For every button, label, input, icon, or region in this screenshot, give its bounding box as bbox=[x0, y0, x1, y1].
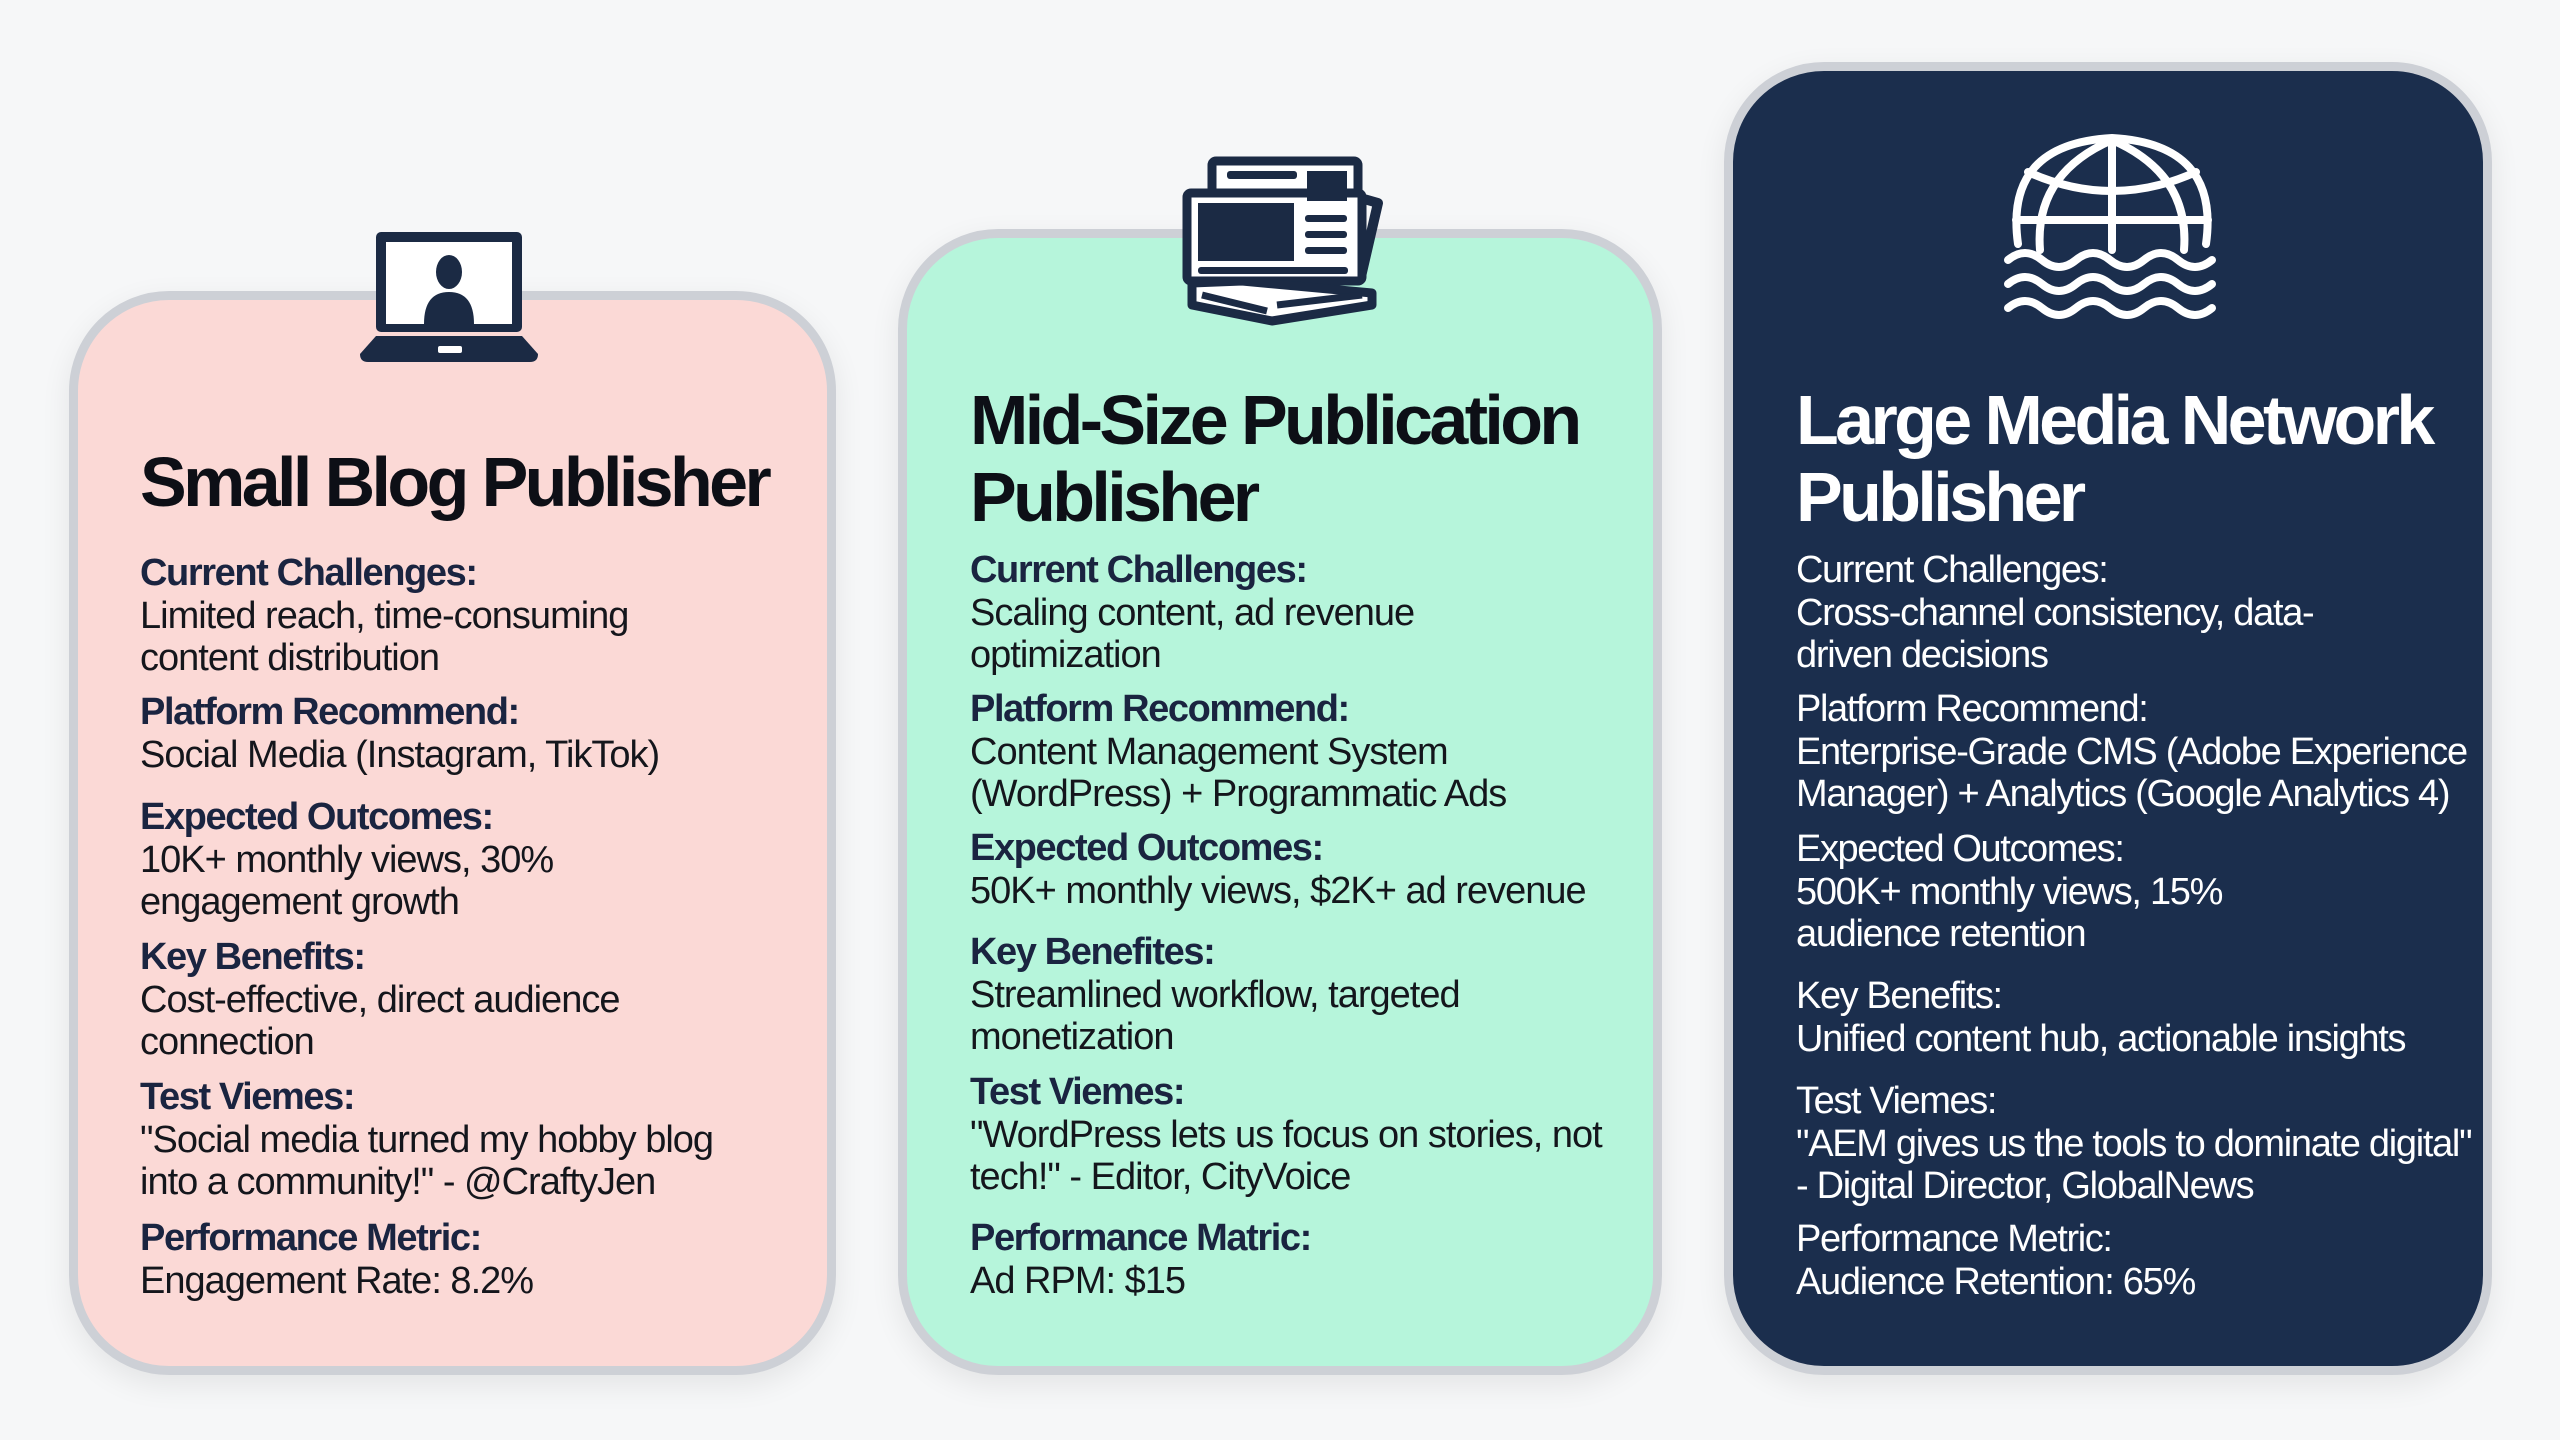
text: testimonial bbox=[140, 1076, 713, 1203]
icon: laptop bbox=[360, 232, 538, 362]
icon: globe with waves bbox=[2004, 134, 2216, 319]
text: challenges bbox=[970, 549, 1414, 676]
text: outcomes: Expected Outcomes: bbox=[1796, 828, 2124, 870]
text: metric: Performance Metric: bbox=[140, 1217, 481, 1259]
text: testimonial: - Digital Director, GlobalNews bbox=[1796, 1165, 2253, 1207]
text: platform: (WordPress) + Programmatic Ads bbox=[970, 773, 1506, 815]
heading: Large Media Network bbox=[1796, 381, 2432, 459]
text: benefits: monetization bbox=[970, 1016, 1173, 1058]
text: platform bbox=[970, 688, 1506, 815]
heading: Small Blog Publisher bbox=[140, 443, 768, 521]
text: outcomes: Expected Outcomes: bbox=[970, 827, 1323, 869]
text: benefits: Streamlined workflow, targeted bbox=[970, 974, 1460, 1016]
text: metric: Engagement Rate: 8.2% bbox=[140, 1260, 533, 1302]
text: testimonial: Test Viemes: bbox=[1796, 1080, 1996, 1122]
text: outcomes bbox=[1796, 828, 2222, 955]
text: benefits bbox=[140, 936, 619, 1063]
text: metric bbox=[1796, 1218, 2195, 1302]
text: testimonial: into a community!" - @CraftyJen bbox=[140, 1161, 655, 1203]
card background bbox=[898, 229, 1662, 1375]
card background bbox=[1724, 62, 2492, 1375]
text: challenges: Scaling content, ad revenue bbox=[970, 592, 1414, 634]
text: testimonial: Test Viemes: bbox=[140, 1076, 354, 1118]
heading: Mid-Size Publication bbox=[970, 381, 1579, 459]
heading: Publisher bbox=[1796, 458, 2083, 536]
text: outcomes bbox=[140, 796, 553, 923]
panel: small blog publisher bbox=[67, 232, 838, 1387]
text: outcomes: 500K+ monthly views, 15% bbox=[1796, 870, 2222, 912]
text: challenges: driven decisions bbox=[1796, 634, 2048, 676]
text: platform: Platform Recommend: bbox=[140, 691, 519, 733]
text: testimonial bbox=[1796, 1080, 2471, 1207]
text: testimonial: tech!" - Editor, CityVoice bbox=[970, 1156, 1350, 1198]
heading: Publisher bbox=[970, 458, 1257, 536]
text: challenges: Current Challenges: bbox=[970, 549, 1307, 591]
heading bbox=[970, 381, 1579, 536]
text: benefits: connection bbox=[140, 1021, 314, 1063]
text: metric: Ad RPM: $15 bbox=[970, 1260, 1185, 1302]
text: outcomes bbox=[970, 827, 1586, 912]
card background bbox=[69, 291, 836, 1375]
text: metric bbox=[140, 1217, 533, 1302]
text: metric bbox=[970, 1217, 1311, 1302]
text: challenges: optimization bbox=[970, 634, 1161, 676]
text: outcomes: 50K+ monthly views, $2K+ ad revenue bbox=[970, 870, 1586, 912]
icon: newspaper bbox=[1182, 156, 1383, 326]
text: platform bbox=[1796, 688, 2467, 815]
text: challenges bbox=[1796, 549, 2313, 676]
text: testimonial: "Social media turned my hobby blog bbox=[140, 1118, 713, 1160]
text: testimonial: Test Viemes: bbox=[970, 1071, 1184, 1113]
text: benefits: Cost-effective, direct audience bbox=[140, 978, 619, 1020]
text: platform: Platform Recommend: bbox=[970, 688, 1349, 730]
text: challenges: Cross-channel consistency, data- bbox=[1796, 592, 2313, 634]
text: benefits bbox=[970, 931, 1460, 1058]
text: platform: Content Management System bbox=[970, 730, 1448, 772]
text: challenges: Current Challenges: bbox=[1796, 549, 2107, 591]
text: outcomes: Expected Outcomes: bbox=[140, 796, 493, 838]
text: benefits: Key Benefites: bbox=[970, 931, 1214, 973]
text: challenges bbox=[140, 552, 628, 679]
text: outcomes: engagement growth bbox=[140, 881, 459, 923]
panel: large media network publisher bbox=[1722, 62, 2494, 1387]
text: challenges: content distribution bbox=[140, 637, 439, 679]
text: outcomes: 10K+ monthly views, 30% bbox=[140, 838, 553, 880]
text: benefits: Key Benefits: bbox=[140, 936, 365, 978]
text: challenges: Current Challenges: bbox=[140, 552, 477, 594]
text: testimonial: "AEM gives us the tools to dominate digital" bbox=[1796, 1122, 2471, 1164]
text: platform: Manager) + Analytics (Google Analytics 4) bbox=[1796, 773, 2449, 815]
text: metric: Performance Metric: bbox=[1796, 1218, 2112, 1260]
text: platform: Enterprise-Grade CMS (Adobe Experience bbox=[1796, 730, 2467, 772]
heading bbox=[1796, 381, 2436, 536]
text: metric: Performance Matric: bbox=[970, 1217, 1311, 1259]
text: testimonial bbox=[970, 1071, 1602, 1198]
text: platform: Platform Recommend: bbox=[1796, 688, 2147, 730]
text: benefits: Key Benefits: bbox=[1796, 975, 2002, 1017]
text: platform: Social Media (Instagram, TikTok) bbox=[140, 734, 659, 776]
text: outcomes: audience retention bbox=[1796, 913, 2085, 955]
panel: mid-size publication publisher bbox=[896, 156, 1664, 1387]
text: challenges: Limited reach, time-consuming bbox=[140, 594, 628, 636]
text: benefits bbox=[1796, 975, 2406, 1060]
text: metric: Audience Retention: 65% bbox=[1796, 1260, 2195, 1302]
text: platform bbox=[140, 691, 659, 776]
text: benefits: Unified content hub, actionable insights bbox=[1796, 1018, 2405, 1060]
text: testimonial: "WordPress lets us focus on stories, not bbox=[970, 1114, 1602, 1156]
